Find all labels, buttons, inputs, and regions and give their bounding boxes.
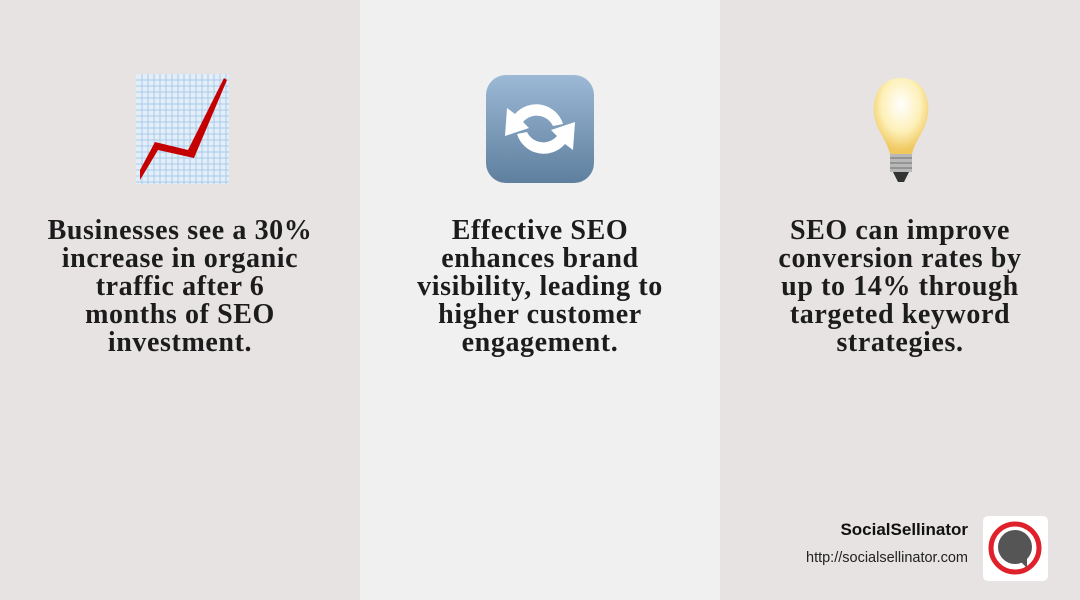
text: stat 3: conversion rates by (778, 243, 1022, 274)
logo (983, 516, 1048, 581)
text: stat 1: traffic after 6 (96, 271, 264, 302)
text: stat 2: higher customer (438, 299, 642, 330)
text: stat 2: enhances brand (441, 243, 639, 274)
text: stat 3: targeted keyword (790, 299, 1010, 330)
text: stat 1: Businesses see a 30% (48, 215, 312, 246)
text: stat 3 (778, 215, 1022, 358)
text: stat 3: up to 14% through (781, 271, 1019, 302)
brand block (806, 516, 1048, 581)
panel: middle column (360, 0, 720, 600)
icon: refresh arrows (486, 75, 594, 183)
text: stat 3: strategies. (836, 327, 964, 358)
text: stat 1: increase in organic (62, 243, 298, 274)
panel: right column (720, 0, 1080, 600)
panel: left column (0, 0, 360, 600)
brand url: http://socialsellinator.com (806, 550, 968, 566)
text: stat 1 (48, 215, 312, 358)
icon: light bulb (874, 78, 928, 182)
text: stat 2: Effective SEO (452, 215, 628, 246)
icon: chart increasing (136, 74, 229, 184)
text: stat 1: months of SEO (85, 299, 275, 330)
text: stat 2: visibility, leading to (417, 271, 663, 302)
text: stat 1: investment. (108, 327, 252, 358)
text: stat 2 (417, 215, 663, 358)
text: stat 3: SEO can improve (790, 215, 1010, 246)
text: stat 2: engagement. (462, 327, 618, 358)
brand name: SocialSellinator (840, 520, 968, 539)
